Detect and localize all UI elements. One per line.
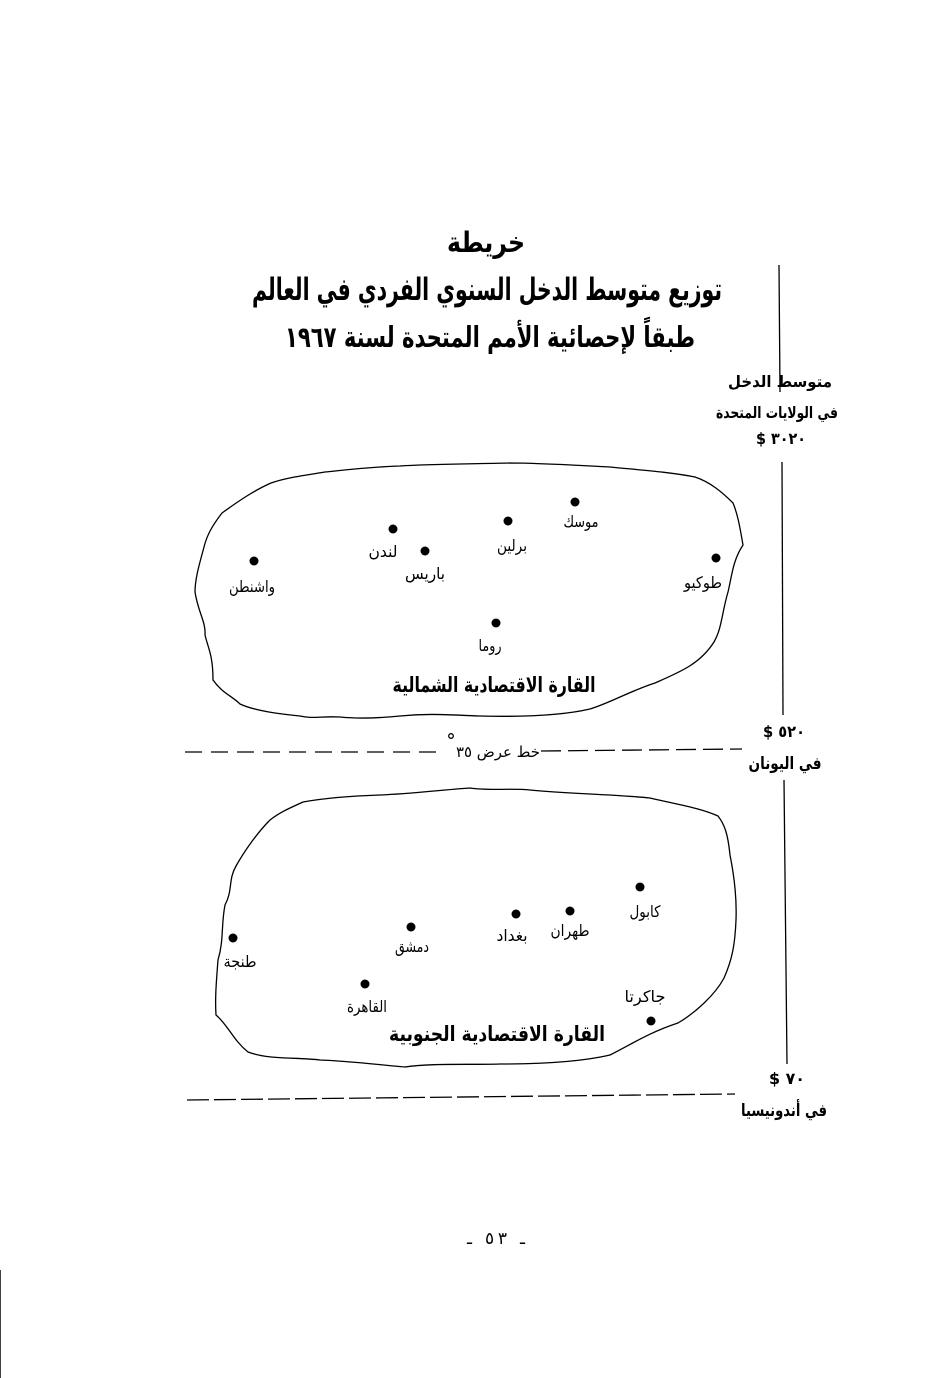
panel: northern economic continent xyxy=(195,463,743,718)
panel: southern economic continent xyxy=(216,788,736,1067)
axis label: United States income: في الولايات المتحدة xyxy=(716,403,838,423)
city: Baghdad xyxy=(496,910,528,945)
axis label: Indonesia income: في أندونيسيا xyxy=(741,1099,827,1121)
axis label: Greece income: $ ٥٢٠ xyxy=(763,722,805,741)
city: Jakarta xyxy=(624,987,666,1026)
income axis: vertical lines xyxy=(779,265,787,1064)
city: Kabul: كابول xyxy=(630,902,661,922)
city: Washington: واشنطن xyxy=(229,577,275,597)
city: Moscow xyxy=(564,498,598,532)
city: London: لندن xyxy=(368,542,398,561)
axis label: United States income xyxy=(716,372,838,448)
city: Tehran: طهران xyxy=(550,921,590,941)
city: Damascus xyxy=(395,922,429,957)
city: Rome xyxy=(478,618,502,656)
city: Rome: روما xyxy=(478,636,502,656)
city: Berlin: برلين xyxy=(497,536,527,556)
scan edge line xyxy=(0,1270,1,1378)
axis label: United States income: $ ٣٠٢٠ xyxy=(756,429,806,448)
northern continent label: القارة الاقتصادية الشمالية xyxy=(392,673,596,697)
latitude label: خط عرض ٣٥ xyxy=(456,743,540,761)
southern continent outline xyxy=(216,788,736,1067)
city: Moscow: موسك xyxy=(564,512,598,532)
latitude 35 dashed line xyxy=(185,749,742,752)
city: Cairo: القاهرة xyxy=(347,997,387,1017)
city: Paris xyxy=(405,546,445,584)
axis label: United States income: متوسط الدخل xyxy=(728,372,832,391)
city: Tokyo xyxy=(683,554,722,593)
axis label: Indonesia income: $ ٧٠ xyxy=(769,1069,805,1088)
city: Tokyo: طوكيو xyxy=(683,573,722,593)
title block xyxy=(252,226,722,354)
latitude label xyxy=(449,734,540,761)
city: Berlin xyxy=(497,516,527,556)
title: map: خريطة xyxy=(447,226,525,259)
subtitle line two: طبقاً لإحصائية الأمم المتحدة لسنة ١٩٦٧ xyxy=(285,317,695,354)
axis label: Greece income xyxy=(748,722,822,774)
axis label: Greece income: في اليونان xyxy=(748,754,822,774)
lower dashed line xyxy=(187,1094,735,1100)
city: Tangier: طنجة xyxy=(224,952,256,971)
city: Paris: باريس xyxy=(405,564,445,584)
southern continent label: القارة الاقتصادية الجنوبية xyxy=(389,1022,605,1046)
city: Tehran xyxy=(550,906,590,941)
city: London xyxy=(368,524,398,561)
city: Jakarta: جاكرتا xyxy=(624,987,666,1007)
city: Tangier xyxy=(224,934,256,971)
city: Kabul xyxy=(630,882,661,922)
northern continent outline xyxy=(195,463,743,718)
city: Cairo xyxy=(347,980,387,1017)
city: Washington xyxy=(229,556,275,597)
page number: ـ ٥٣ ـ xyxy=(466,1229,526,1249)
city: Damascus: دمشق xyxy=(395,937,429,957)
axis label: Indonesia income xyxy=(741,1069,827,1121)
city: Baghdad: بغداد xyxy=(496,926,528,945)
